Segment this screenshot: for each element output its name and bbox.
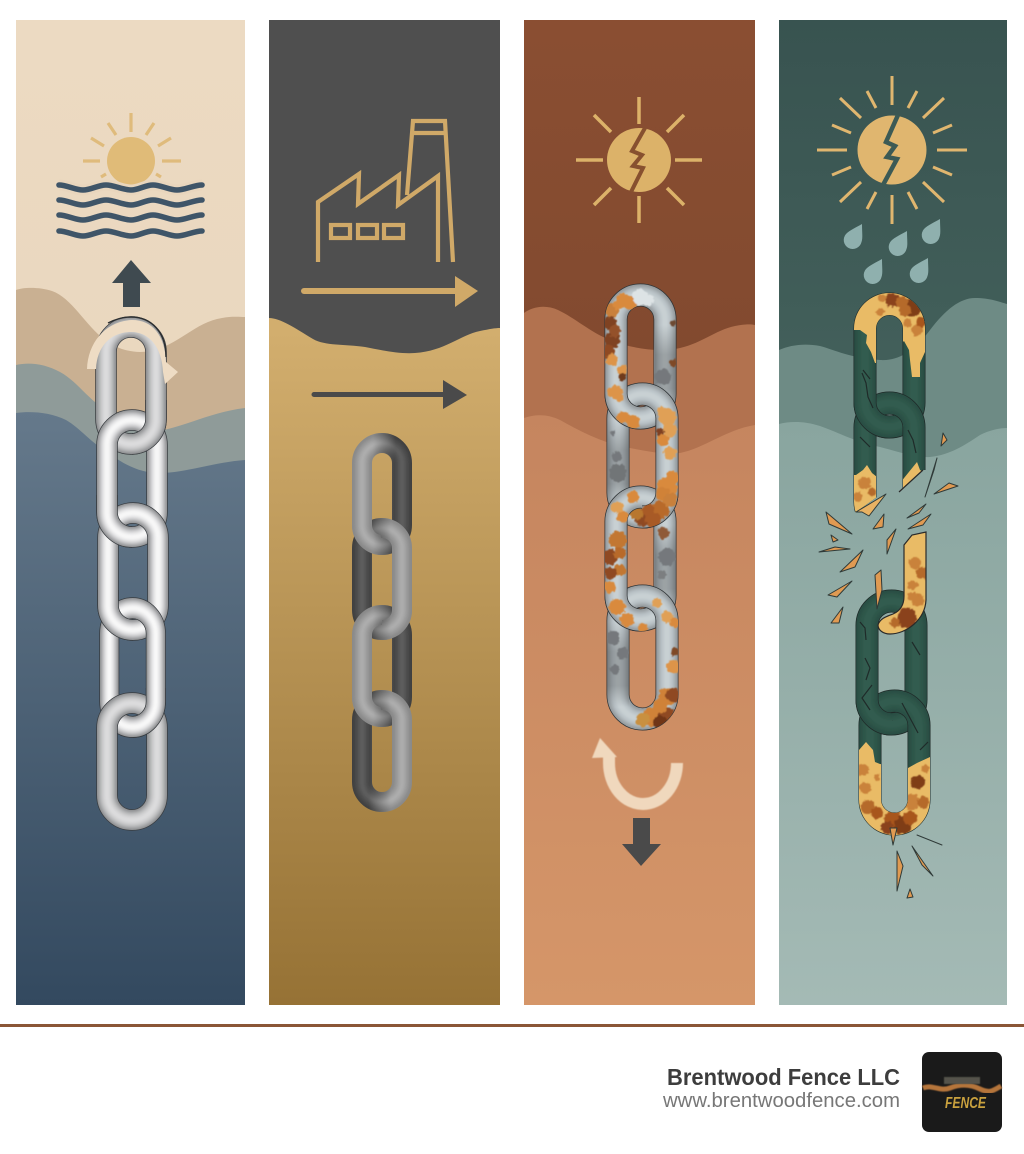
- icon: factory: [318, 121, 453, 262]
- mid teal wave: [779, 298, 1007, 1005]
- chain: lower links: [855, 532, 935, 840]
- sand wave layer: [269, 318, 500, 1005]
- grey wave layer: [16, 364, 245, 1005]
- panel background dark teal: [779, 20, 1007, 1005]
- chain: upper broken links: [854, 292, 926, 512]
- broken chain shards: [819, 433, 958, 898]
- arrow: up: [112, 260, 151, 307]
- panel: industrial factory with grey chain: [269, 20, 500, 1005]
- footer: company name: Brentwood Fence LLC: [667, 1064, 900, 1090]
- mid terracotta wave: [524, 307, 755, 1005]
- icon: rain drops: [844, 219, 940, 284]
- arrow: dark right: [312, 380, 467, 409]
- icon: cracked sun: [576, 97, 702, 223]
- light terracotta wave: [524, 415, 755, 1005]
- arrow: circular cream arc: [87, 317, 178, 384]
- panel background rust brown: [524, 20, 755, 1005]
- icon: sun over waves: [59, 113, 202, 236]
- panel background charcoal: [269, 20, 500, 1005]
- footer: logo: FENCE: [945, 1095, 987, 1112]
- icon: cracked sun with rays: [817, 76, 967, 224]
- panel: storm with broken chain: [779, 20, 1007, 1005]
- arrow: down: [622, 818, 661, 866]
- chain: grey links: [362, 443, 402, 802]
- chain: rusting links: [601, 289, 680, 730]
- footer divider line: [0, 1024, 1024, 1027]
- footer: logo: [922, 1052, 1002, 1132]
- panel: calm sea with clean steel chain: [16, 20, 245, 1005]
- light teal wave: [779, 422, 1007, 1005]
- panel background sand: [16, 20, 245, 1005]
- arrow: gold right: [301, 276, 478, 307]
- panel: heat with rusting chain: [524, 20, 755, 1005]
- footer: website: www.brentwoodfence.com: [662, 1090, 900, 1112]
- arrow: cream u-turn: [592, 738, 677, 804]
- tan wave layer: [16, 288, 245, 1005]
- blue deep water layer: [16, 412, 245, 1005]
- chain: clean steel links: [106, 327, 158, 820]
